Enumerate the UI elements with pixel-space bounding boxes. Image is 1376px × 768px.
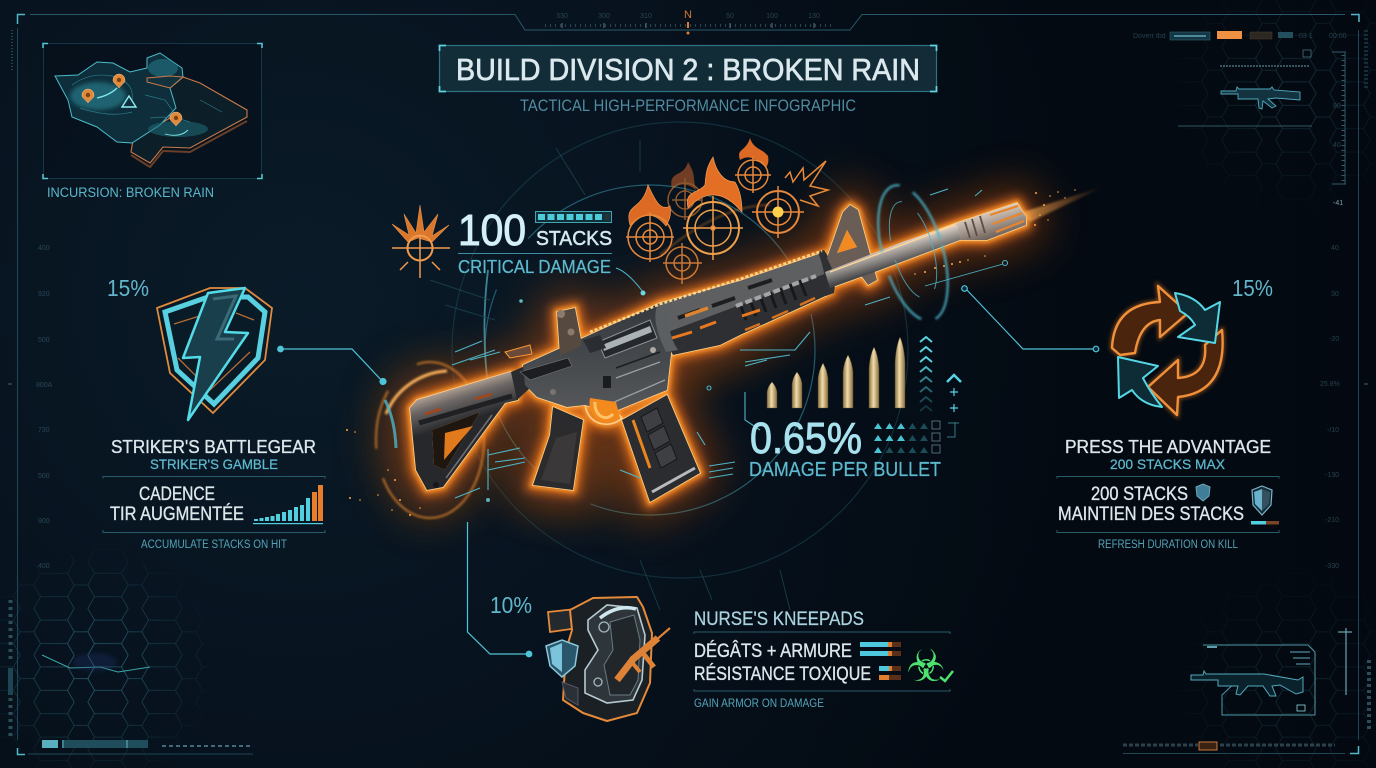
hud readouts: bottom left: [8, 600, 250, 748]
target 1: [626, 185, 674, 262]
panel: incursion map: [43, 44, 262, 178]
compass: 100: [766, 13, 778, 20]
note: ACCUMULATE STACKS ON HIT: [141, 539, 287, 551]
panel: striker's battlegear: [103, 275, 386, 551]
meter bars: [860, 642, 901, 680]
subtitle: TACTICAL HIGH-PERFORMANCE INFOGRAPHIC: [520, 97, 856, 115]
hud readouts: top right: Doverr tbd: [1133, 33, 1166, 40]
percent: 10%: [490, 592, 532, 618]
trigger guard: [589, 398, 620, 422]
heading: NURSE'S KNEEPADS: [694, 609, 864, 630]
panel: critical damage: [392, 205, 646, 296]
title: [439, 45, 937, 92]
hud rings behind rifle: [381, 122, 908, 610]
hud readouts: top right: 40: [1333, 142, 1341, 149]
receiver: [523, 303, 672, 412]
hud scale labels: 40: [1331, 245, 1339, 252]
rear sight: [557, 308, 582, 356]
label: DAMAGE PER BULLET: [749, 459, 941, 481]
icon: large shield: [1252, 486, 1272, 515]
percent: 15%: [107, 275, 149, 301]
hud readouts: top right: 00:00: [1329, 33, 1347, 40]
compass: 130: [808, 13, 820, 20]
icon: small shield: [1196, 484, 1210, 501]
compass: [545, 9, 832, 34]
panel: press the advantage: [962, 275, 1279, 551]
compass: 300: [598, 13, 610, 20]
front sight: [827, 205, 877, 285]
hud scale labels: 30: [1331, 291, 1339, 298]
ring around barrel: [865, 177, 961, 329]
map: pins: [82, 74, 182, 126]
target 2: [683, 157, 743, 260]
stack bar: [536, 212, 612, 222]
percent: 15%: [1232, 275, 1273, 301]
target 6 with burst: [752, 161, 828, 238]
map: cyan sector: [55, 53, 183, 143]
triangle meter: [874, 421, 940, 453]
connector: [616, 268, 643, 292]
hud scale labels: 920: [38, 291, 50, 298]
stat text: DÉGÂTS + ARMURE: [694, 640, 852, 662]
handguard: [660, 252, 832, 355]
heading: STRIKER'S BATTLEGEAR: [111, 437, 316, 457]
icon: shield with lightning: [157, 288, 272, 420]
subheading: STRIKER'S GAMBLE: [150, 456, 278, 472]
hud readouts: top right: 03 1: [1299, 33, 1313, 40]
hud readouts: top right: 80: [1333, 103, 1341, 110]
icon: blueprint rifle: [1191, 671, 1303, 696]
hud scale labels: -330: [1325, 563, 1339, 570]
compass: 330: [556, 13, 568, 20]
label critical damage: CRITICAL DAMAGE: [458, 256, 611, 277]
hud scale labels: 25.8%: [1320, 381, 1340, 388]
stat text: CADENCE: [139, 484, 215, 505]
hud scale labels: -/10: [1327, 427, 1339, 434]
heading: PRESS THE ADVANTAGE: [1065, 437, 1271, 457]
icon: check: [940, 671, 953, 681]
connector: [962, 286, 1099, 352]
panel: damage per bullet: [749, 414, 941, 481]
subheading: 200 STACKS MAX: [1110, 456, 1226, 472]
stat text: 200 STACKS: [1091, 484, 1188, 505]
map: orange sector: [131, 77, 247, 163]
hud scale labels: 500: [38, 337, 50, 344]
grip: [533, 407, 583, 490]
title: BUILD DIVISION 2 : BROKEN RAIN: [456, 52, 920, 87]
target 5: [663, 243, 702, 284]
icon: orange rifle: [617, 628, 670, 680]
magazine: [622, 395, 700, 502]
hud scale labels: 900: [38, 518, 50, 525]
panel: striker's battlegear: TIR AUGMENTÉE: [110, 504, 244, 525]
value 100: 100: [458, 206, 526, 255]
icon: small rifle top right: [1221, 87, 1300, 109]
lightning bolt: [183, 288, 248, 420]
hud readouts: top right: [1133, 31, 1347, 207]
hud scale labels: 800A: [36, 382, 53, 389]
icon: bullets: [767, 337, 905, 408]
target 3 dim: [668, 162, 702, 220]
hud scale labels: -20: [1329, 336, 1339, 343]
hud scale labels: [8, 245, 1368, 570]
connector: [468, 522, 532, 657]
hud scale labels: 500: [38, 473, 50, 480]
panel: nurse's kneepads: RÉSISTANCE TOXIQUE: [694, 664, 871, 685]
stock: [410, 372, 522, 490]
panel: press the advantage: MAINTIEN DES STACKS: [1058, 504, 1244, 525]
map caption: INCURSION: BROKEN RAIN: [47, 185, 214, 200]
note: GAIN ARMOR ON DAMAGE: [694, 696, 824, 710]
barrel: [825, 223, 960, 288]
rifle: [375, 186, 1105, 520]
value: 0.65%: [750, 414, 862, 463]
sparks: [346, 189, 1076, 516]
icon: biohazard: ☣: [906, 641, 946, 692]
compass: N: [684, 9, 692, 21]
note: REFRESH DURATION ON KILL: [1098, 539, 1239, 551]
hud readouts: bottom right: [1123, 628, 1369, 750]
hud readouts: top right: -41: [1333, 200, 1343, 207]
hud scale labels: -130: [1325, 472, 1339, 479]
icon: fire targets: [626, 138, 828, 284]
map: triangle marker: [122, 96, 136, 107]
icon: refresh arrows: [1112, 286, 1223, 415]
target 4: [735, 138, 771, 193]
icon: upgrade chevrons: [920, 337, 961, 437]
hud scale labels: 400: [38, 245, 50, 252]
meter: [1251, 521, 1279, 524]
compass: 310: [640, 13, 652, 20]
icon: burst target: [392, 205, 450, 278]
connector: [278, 346, 386, 384]
compass: 50: [726, 13, 734, 20]
bar chart: [253, 485, 323, 524]
hud scale labels: -210: [1325, 517, 1339, 524]
hud tech lines near rifle: [385, 177, 1008, 498]
rifle glow: [375, 186, 1105, 520]
icon: shield badge: [546, 640, 578, 677]
panel: nurse's kneepads: [468, 522, 953, 721]
hud scale labels: 730: [38, 427, 50, 434]
hud scale labels: 400: [38, 563, 50, 570]
icon: kneepad: [546, 597, 670, 721]
label stacks: STACKS: [536, 228, 612, 250]
